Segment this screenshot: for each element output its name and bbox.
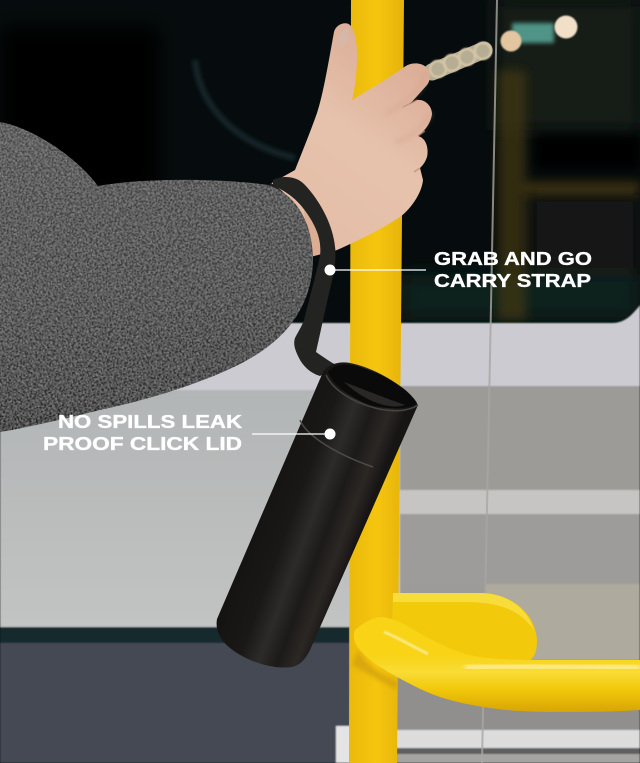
bottle lid opening	[328, 365, 417, 409]
callout: carry strap	[324, 249, 592, 291]
hand gripping the pole	[270, 23, 432, 257]
lid seam	[300, 420, 373, 467]
background: lower carriage wall	[0, 305, 640, 763]
callout: leak proof lid: NO SPILLS LEAK	[58, 412, 242, 432]
glass panel edge	[482, 0, 497, 763]
black bottle	[217, 362, 418, 668]
callout: carry strap: GRAB AND GO	[434, 249, 592, 269]
background: dark train window	[0, 0, 640, 335]
carry strap	[270, 177, 338, 376]
sleeve of grey wool coat	[0, 122, 313, 432]
yellow handrail and bracket	[352, 593, 640, 712]
yellow pole	[349, 0, 404, 763]
callout: leak proof lid: PROOF CLICK LID	[43, 434, 242, 454]
callout: leak proof lid	[43, 412, 336, 454]
callout: carry strap: CARRY STRAP	[434, 271, 591, 291]
blurred yellow window frame reflections	[498, 70, 640, 320]
bokeh lights	[430, 16, 578, 77]
